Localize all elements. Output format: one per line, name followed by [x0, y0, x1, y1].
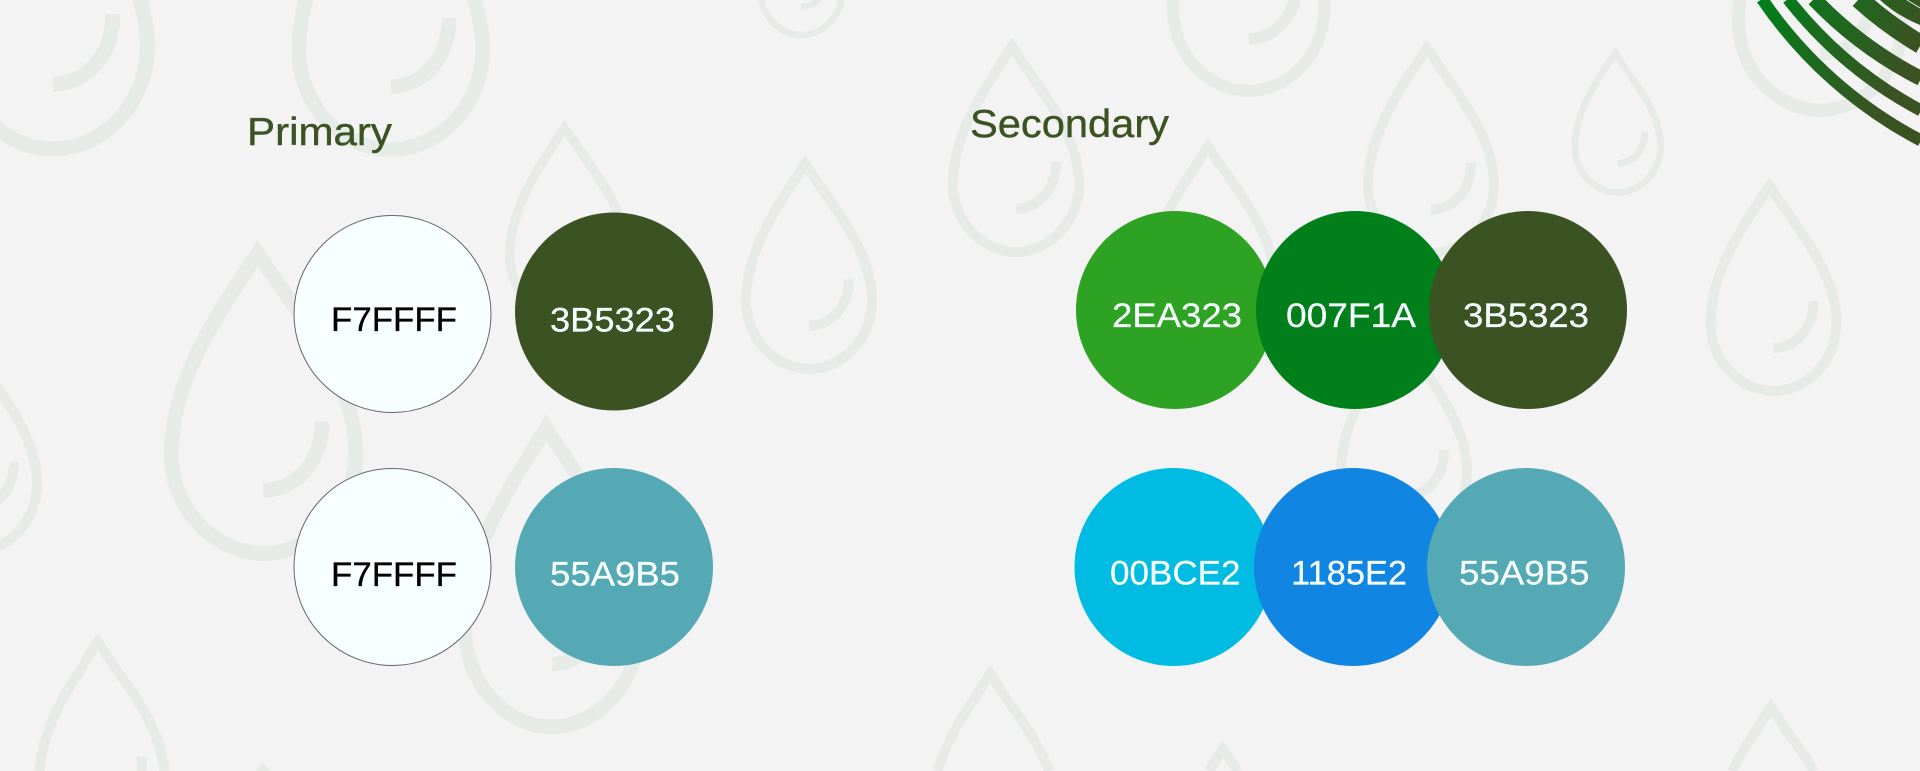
corner decoration: concentric green arcs [1762, 0, 1920, 140]
swatch: F7FFFF bottom [294, 468, 491, 666]
panel: primary palette [247, 111, 713, 666]
swatch: 1185E2 [1254, 468, 1452, 666]
swatch: 55A9B5 [1427, 468, 1625, 666]
swatch: 2EA323: 2EA323 [1112, 297, 1242, 335]
swatch: 3B5323 [1429, 211, 1627, 409]
swatch: F7FFFF top: F7FFFF [331, 301, 457, 339]
swatch: 55A9B5: 55A9B5 [1459, 554, 1590, 592]
swatch: 55A9B5 [515, 468, 713, 666]
swatch: 55A9B5: 55A9B5 [550, 556, 680, 594]
swatch: 3B5323: 3B5323 [550, 302, 675, 340]
swatch: 00BCE2: 00BCE2 [1110, 554, 1240, 592]
swatch: 007F1A: 007F1A [1286, 297, 1416, 335]
swatch: 2EA323 [1076, 211, 1274, 409]
swatch: F7FFFF bottom: F7FFFF [331, 556, 457, 594]
swatch: 3B5323: 3B5323 [1463, 297, 1589, 335]
panel: secondary palette [970, 103, 1627, 666]
swatch: 00BCE2 [1074, 468, 1272, 666]
swatch: 3B5323 [515, 212, 713, 410]
heading: Primary: Primary [247, 111, 393, 154]
swatch: 007F1A [1256, 211, 1454, 409]
swatch: F7FFFF top [294, 216, 491, 412]
swatch: 1185E2: 1185E2 [1291, 554, 1407, 592]
heading: Secondary: Secondary [970, 103, 1170, 146]
